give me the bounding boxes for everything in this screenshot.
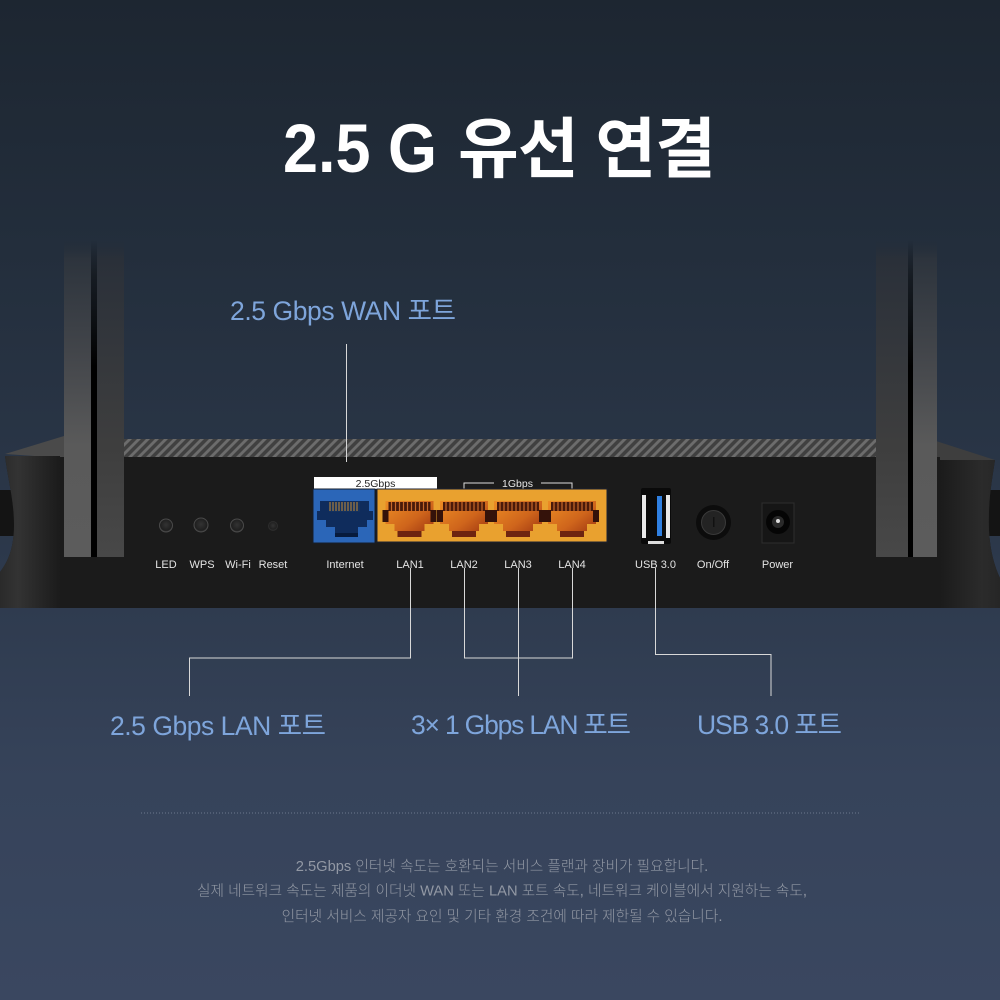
speed tag: 2.5Gbps: 2.5Gbps — [356, 478, 395, 490]
footnote: 인터넷 서비스 제공자 요인 및 기타 환경 조건에 따라 제한될 수 있습니다. — [282, 908, 722, 925]
callout: 2.5G LAN port — [110, 568, 410, 741]
right cable stub — [986, 490, 1000, 536]
speed bracket: 1Gbps — [464, 478, 572, 490]
LAN1 socket — [382, 501, 436, 537]
USB 3.0 port — [641, 488, 671, 544]
footnote: 실제 네트워크 속도는 제품의 이더넷 WAN 또는 LAN 포트 속도, 네트워크 케이블에서 지원하는 속도, — [197, 882, 807, 900]
router body — [0, 436, 1000, 608]
port labels: On/Off — [697, 559, 730, 571]
left flank shading — [0, 456, 60, 608]
port labels: LAN2 — [450, 559, 478, 571]
port labels: Power — [762, 559, 793, 571]
LAN port block — [377, 489, 607, 542]
port labels: LAN1 — [396, 559, 424, 571]
LAN3 socket — [491, 501, 545, 537]
port labels: Reset — [259, 559, 287, 571]
callout: 2.5G LAN port: 2.5 Gbps LAN 포트 — [110, 711, 326, 741]
callout: 3x 1G LAN ports — [411, 568, 631, 740]
right antenna — [876, 240, 937, 557]
top mesh surface — [116, 439, 884, 458]
port labels — [155, 559, 793, 571]
dotted divider — [141, 812, 860, 814]
left cable stub — [0, 490, 14, 536]
right flank shading — [940, 460, 1000, 608]
callout: USB port: USB 3.0 포트 — [697, 710, 842, 740]
title: 유선 연결 — [458, 96, 716, 192]
callout: 3x 1G LAN ports: 3× 1 Gbps LAN 포트 — [411, 710, 631, 740]
port labels: LAN4 — [558, 559, 586, 571]
speed bracket: 1Gbps: 1Gbps — [502, 478, 533, 490]
port labels: LED — [155, 559, 177, 571]
LAN4 socket — [545, 501, 599, 537]
left wing top — [5, 436, 64, 458]
callout: USB port — [656, 568, 842, 740]
port labels: WPS — [189, 559, 215, 571]
speed tag: 2.5Gbps — [314, 477, 437, 490]
port labels: Internet — [326, 559, 364, 571]
port labels: LAN3 — [504, 559, 532, 571]
port labels: Wi-Fi — [225, 559, 251, 571]
power switch — [696, 505, 731, 540]
footnote: 2.5Gbps 인터넷 속도는 호환되는 서비스 플랜과 장비가 필요합니다. — [296, 858, 708, 875]
footnote — [197, 858, 807, 925]
chassis — [0, 456, 1000, 608]
title: 2.5 G — [283, 110, 437, 187]
status buttons — [160, 518, 278, 532]
left antenna — [64, 240, 124, 557]
power jack — [762, 503, 794, 543]
port labels: USB 3.0 — [635, 559, 676, 571]
internet port — [313, 489, 375, 543]
LAN2 socket — [437, 501, 491, 537]
right wing top — [936, 441, 995, 460]
title — [283, 96, 716, 192]
callout: WAN port: 2.5 Gbps WAN 포트 — [230, 296, 456, 326]
